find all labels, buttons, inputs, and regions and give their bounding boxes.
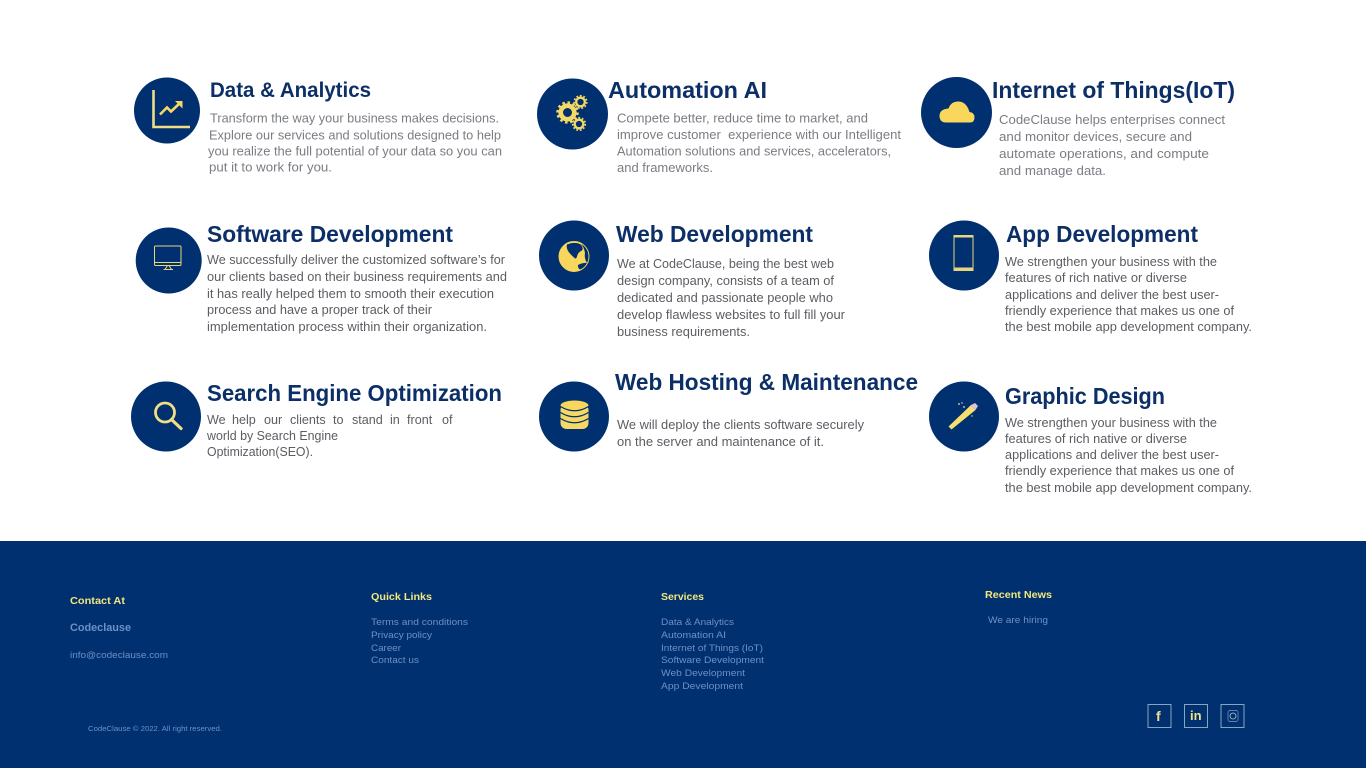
copyright: CodeClause © 2022. All right reserved. [88,724,222,733]
text block: Compete better, reduce time to market, and [617,112,868,126]
footer column: contact [70,596,168,661]
heading: Data & Analytics [210,79,371,102]
text block: We [207,413,226,427]
text block: applications and deliver the best user- [1005,288,1219,302]
text block: and frameworks. [617,161,713,175]
text block: in [390,413,400,427]
text block: friendly experience that makes us one of [1005,464,1234,478]
text block: implementation process within their organization. [207,320,487,334]
text block: Automation solutions and services, accelerators, [617,144,891,158]
text block [617,112,902,175]
footer column: services: App Development [661,681,743,692]
text block: it has really helped them to smooth their execution [207,287,494,301]
text block: develop flawless websites to full fill your [617,308,845,322]
text block: and monitor devices, secure and [999,130,1192,144]
footer column: recent news [985,590,1052,626]
text block: CodeClause helps enterprises connect [999,113,1226,127]
text block [617,418,865,449]
panel: Data & Analytics [134,78,502,174]
panel: Software Development [136,221,507,334]
text block: world by Search Engine [206,429,338,443]
footer column: quick links: Terms and conditions [371,617,468,628]
footer column: quick links: Contact us [371,655,419,666]
text block: on the server and maintenance of it. [617,435,824,449]
text block: clients [290,413,326,427]
panel: Internet of Things [921,77,1235,178]
text block: applications and deliver the best user- [1005,448,1219,462]
text block: and manage data. [999,164,1106,178]
text block: improve customer experience with our Intelligent [617,128,902,142]
text block: We will deploy the clients software securely [617,418,865,432]
text block: We strengthen your business with the [1005,416,1217,430]
text block: you realize the full potential of your data so you can [208,144,502,158]
icon: instagram [1221,704,1244,728]
heading: Graphic Design [1005,383,1165,409]
text block [208,112,502,174]
footer column: services [661,592,764,692]
heading: Internet of Things(IoT) [992,77,1235,103]
footer column: recent news: Recent News [985,590,1052,601]
text block: We successfully deliver the customized software’s for [207,253,505,267]
footer column: services: Automation AI [661,630,726,641]
text block: of [442,413,453,427]
heading: Automation AI [608,77,767,103]
panel: Web Development [539,220,845,339]
panel: App Development [929,220,1252,334]
icon: smartphone [929,220,999,290]
text block: to [333,413,344,427]
footer column: services: Software Development [661,655,764,666]
footer column: services: Data & Analytics [661,617,734,628]
footer column: quick links: Privacy policy [371,630,432,641]
text block [999,113,1226,178]
text block [207,253,507,334]
text block: front [407,413,433,427]
icon: database stack [539,382,609,452]
heading: Search Engine Optimization [207,380,502,406]
footer column: contact: Contact At [70,596,126,607]
text block: features of rich native or diverse [1005,271,1187,285]
text block [1005,416,1252,495]
panel: footer [0,541,1366,768]
text block [206,413,453,459]
text block: our clients based on their business requirements and [207,270,507,284]
icon: globe [539,220,609,290]
text block: Optimization(SEO). [207,445,313,459]
icon: facebook [1148,704,1171,728]
footer column: recent news: We are hiring [988,615,1048,626]
icon: line chart [134,78,200,144]
panel: Graphic Design [929,382,1252,495]
text block: business requirements. [617,325,750,339]
icon: gears [537,78,608,150]
icon: linkedin: in [1190,708,1202,723]
text block: help [232,413,256,427]
footer column: contact: info@codeclause.com [70,650,168,661]
text block: We strengthen your business with the [1005,255,1217,269]
text block: put it to work for you. [209,160,332,174]
footer column: services: Internet of Things (IoT) [661,643,763,654]
text block: process and have a proper track of their [207,303,432,317]
panel: Search Engine Optimization [131,380,502,459]
icon: facebook: f [1156,708,1161,724]
text block: our [264,413,282,427]
text block: Transform the way your business makes decisions. [210,112,499,126]
heading: Software Development [207,221,453,247]
text block [617,257,845,339]
text block: automate operations, and compute [999,147,1209,161]
text block: design company, consists of a team of [617,274,834,288]
text block: the best mobile app development company. [1005,320,1252,334]
icon: monitor [136,228,202,294]
text block: Explore our services and solutions designed to help [209,128,501,142]
text block: features of rich native or diverse [1005,432,1187,446]
icon: cloud [921,77,992,148]
heading: Web Development [616,221,813,247]
text block: the best mobile app development company. [1005,481,1252,495]
heading: Web Hosting & Maintenance [615,369,918,395]
panel: Automation AI [537,77,902,175]
icon: magic wand [929,382,999,452]
icon: magnifier [131,382,201,452]
footer column: quick links: Quick Links [371,592,432,603]
heading: App Development [1006,221,1198,247]
footer column: quick links: Career [371,643,402,654]
footer column: contact: Codeclause [70,622,131,634]
footer column: quick links [371,592,468,666]
footer column: services: Services [661,592,704,603]
text block [1005,255,1252,334]
text block: friendly experience that makes us one of [1005,304,1234,318]
text block: We at CodeClause, being the best web [617,257,834,271]
footer column: services: Web Development [661,668,745,679]
text block: stand [352,413,383,427]
icon: linkedin [1184,704,1208,728]
panel: Web Hosting & Maintenance [539,369,918,452]
text block: dedicated and passionate people who [617,291,833,305]
